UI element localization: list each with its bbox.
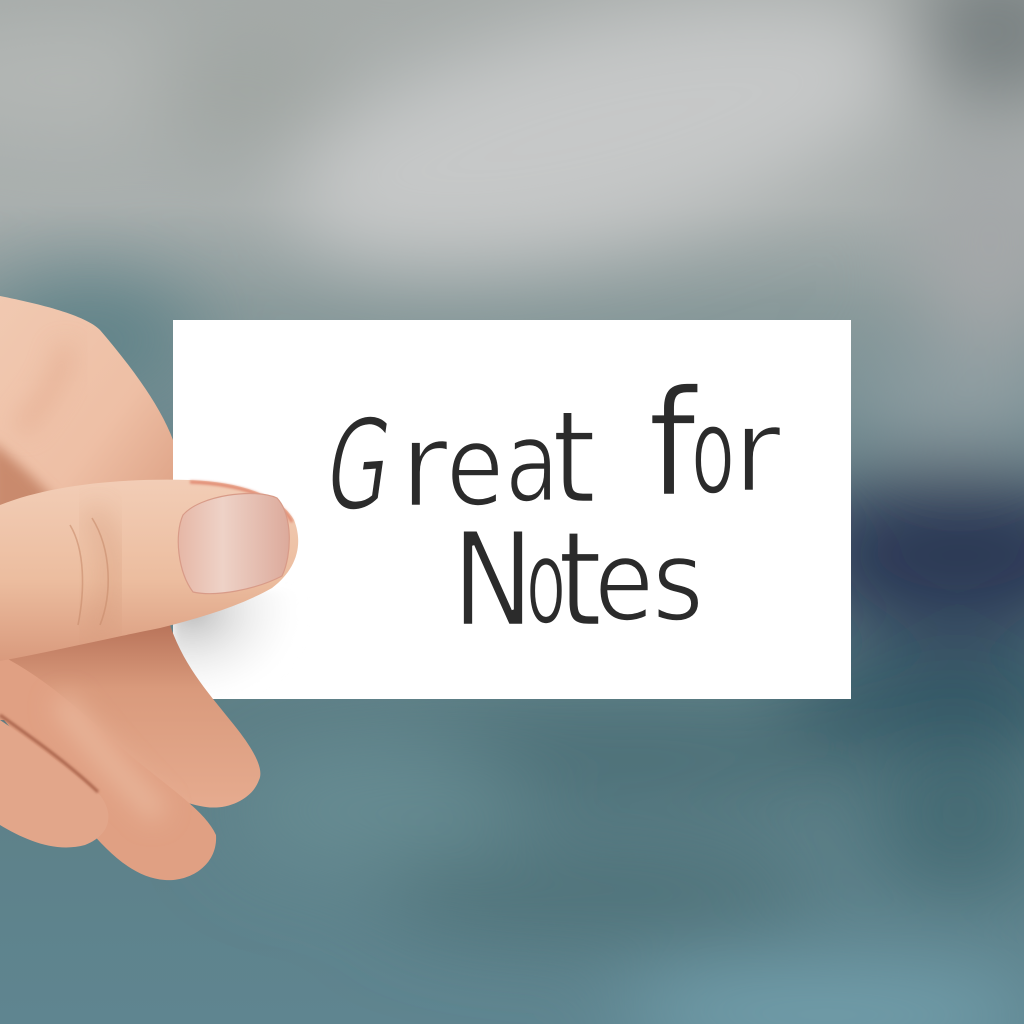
- thumb: [0, 480, 298, 661]
- thumb knuckle creases: [70, 510, 111, 635]
- line: Great for: e: [446, 402, 504, 532]
- white business card: [173, 320, 851, 699]
- line: Notes: s: [652, 517, 704, 647]
- thumb shadow on card: [173, 594, 268, 675]
- line: Great for: t: [552, 384, 596, 533]
- thumbnail: [178, 493, 289, 594]
- line: Great for: r: [400, 396, 448, 534]
- little finger: [0, 720, 108, 847]
- line: Notes: e: [594, 517, 654, 647]
- middle finger: [0, 625, 260, 808]
- hand: [0, 296, 298, 880]
- handwritten text: [318, 358, 781, 657]
- line: Notes: t: [558, 503, 602, 657]
- ring finger shading: [60, 700, 160, 815]
- line: Great for: [318, 358, 781, 541]
- line: Great for: r: [733, 384, 781, 519]
- line: Notes: N: [452, 504, 534, 656]
- palm fill behind fingers: [0, 400, 60, 720]
- line: Notes: o: [526, 513, 566, 651]
- index finger shading: [0, 352, 71, 505]
- line: Notes: [452, 503, 704, 657]
- line: Great for: G: [318, 391, 400, 541]
- line: Great for: f: [648, 358, 699, 530]
- line: Great for: a: [505, 398, 559, 528]
- index finger behind card: [0, 296, 173, 520]
- line: Great for: o: [691, 383, 735, 522]
- ring finger: [0, 655, 216, 880]
